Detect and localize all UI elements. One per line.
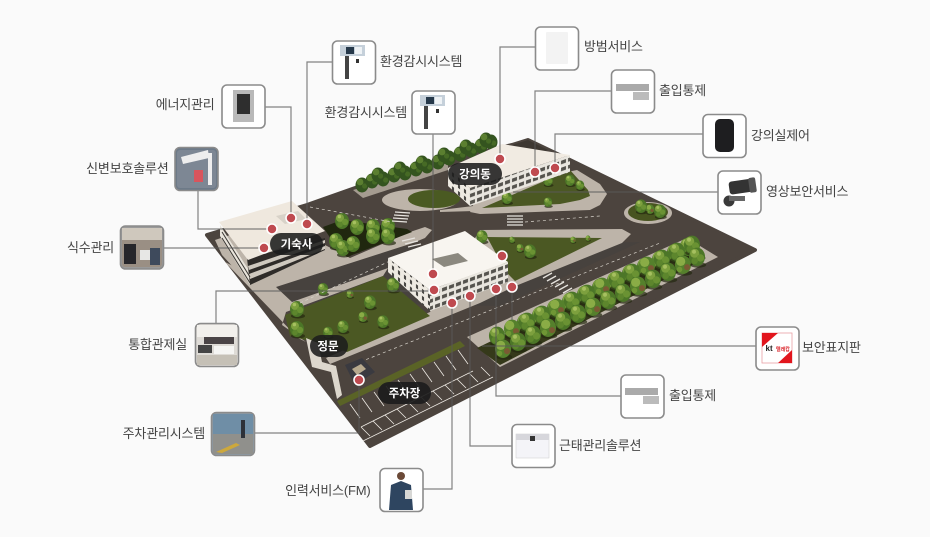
roundabout trees <box>635 199 667 219</box>
pill: 정문 <box>310 335 348 357</box>
roundabout lawn <box>628 203 668 221</box>
central walkway <box>326 229 631 364</box>
item: 환경감시시스템 2: 환경감시시스템 <box>325 105 407 120</box>
walkway around ellipse lawn <box>382 189 458 211</box>
ellipse lawn <box>408 190 460 208</box>
item: 출입통제 2 <box>621 375 716 418</box>
item: 환경감시시스템 1 <box>332 41 462 84</box>
item: 환경감시시스템 2 <box>325 91 455 134</box>
item: 주차관리시스템 <box>123 412 254 456</box>
lecture building <box>448 140 570 206</box>
lecture front lawn <box>482 170 590 208</box>
item: 식수관리: 식수관리 <box>67 240 114 255</box>
item: 신변보호솔루션: 신변보호솔루션 <box>86 161 168 176</box>
item: 보안표지판: 텔레캅 <box>776 346 790 353</box>
item: 식수관리 <box>67 226 164 269</box>
item: 출입통제 2: 출입통제 <box>669 388 716 403</box>
item: 통합관제실: 통합관제실 <box>128 337 187 352</box>
walkway dorm front <box>215 225 432 292</box>
item: 인력서비스(FM) <box>285 468 423 512</box>
lecture front walkway <box>470 170 607 214</box>
main lawn trees <box>290 278 400 339</box>
campus map <box>207 132 755 446</box>
ground base <box>207 140 755 446</box>
pill: 주차장: 주차장 <box>389 387 421 400</box>
item: 방범서비스: 방범서비스 <box>584 39 643 54</box>
item: 근태관리솔루션 <box>512 424 641 468</box>
item: 신변보호솔루션 <box>86 148 218 190</box>
parking lot <box>337 341 493 441</box>
roundabout <box>624 202 672 224</box>
item: 근태관리솔루션: 근태관리솔루션 <box>559 438 641 453</box>
item: 출입통제 1 <box>612 70 706 113</box>
tree belt soil <box>477 248 706 365</box>
item: 출입통제 1: 출입통제 <box>659 83 706 98</box>
pill: 기숙사 <box>270 233 323 255</box>
main gate <box>306 338 342 399</box>
crosswalks <box>392 212 572 293</box>
item: 통합관제실 <box>128 324 238 366</box>
lecture lawn trees <box>502 175 585 208</box>
item: 에너지관리: 에너지관리 <box>156 97 214 112</box>
tree belt walkway <box>467 238 718 367</box>
walkway left side <box>225 262 388 342</box>
pill: 강의동: 강의동 <box>459 167 491 181</box>
main building <box>388 231 508 311</box>
pill: 기숙사: 기숙사 <box>281 237 313 251</box>
item: 보안표지판: 보안표지판 <box>802 340 861 355</box>
item: 방범서비스 <box>536 27 643 70</box>
back tree row <box>356 132 498 192</box>
pill: 강의동 <box>448 163 502 185</box>
item: 인력서비스(FM): 인력서비스(FM) <box>285 483 370 498</box>
light wedge <box>440 204 510 212</box>
item: 에너지관리 <box>156 85 265 128</box>
item: 영상보안서비스 <box>718 171 849 214</box>
road center lines <box>300 207 660 364</box>
item: 영상보안서비스: 영상보안서비스 <box>766 184 849 199</box>
tree belt <box>489 236 706 360</box>
leader lines <box>163 47 756 489</box>
central lawn <box>487 237 602 281</box>
item: 강의실제어 <box>703 114 810 158</box>
item: 주차관리시스템: 주차관리시스템 <box>123 426 205 441</box>
car <box>345 358 375 385</box>
item: 강의실제어: 강의실제어 <box>751 128 810 143</box>
upper curb <box>353 163 448 198</box>
dorm garden <box>323 220 412 257</box>
dormitory building <box>219 201 325 285</box>
dorm garden trees <box>329 213 396 258</box>
central lawn trees <box>476 230 591 259</box>
road band <box>276 242 640 306</box>
pill: 정문: 정문 <box>317 340 339 353</box>
pill: 주차장 <box>378 382 431 404</box>
item: 보안표지판: kt <box>766 344 773 353</box>
location markers <box>259 154 560 385</box>
item: 보안표지판 <box>756 327 861 370</box>
item: 환경감시시스템 1: 환경감시시스템 <box>380 54 462 69</box>
main lawn <box>285 276 430 352</box>
